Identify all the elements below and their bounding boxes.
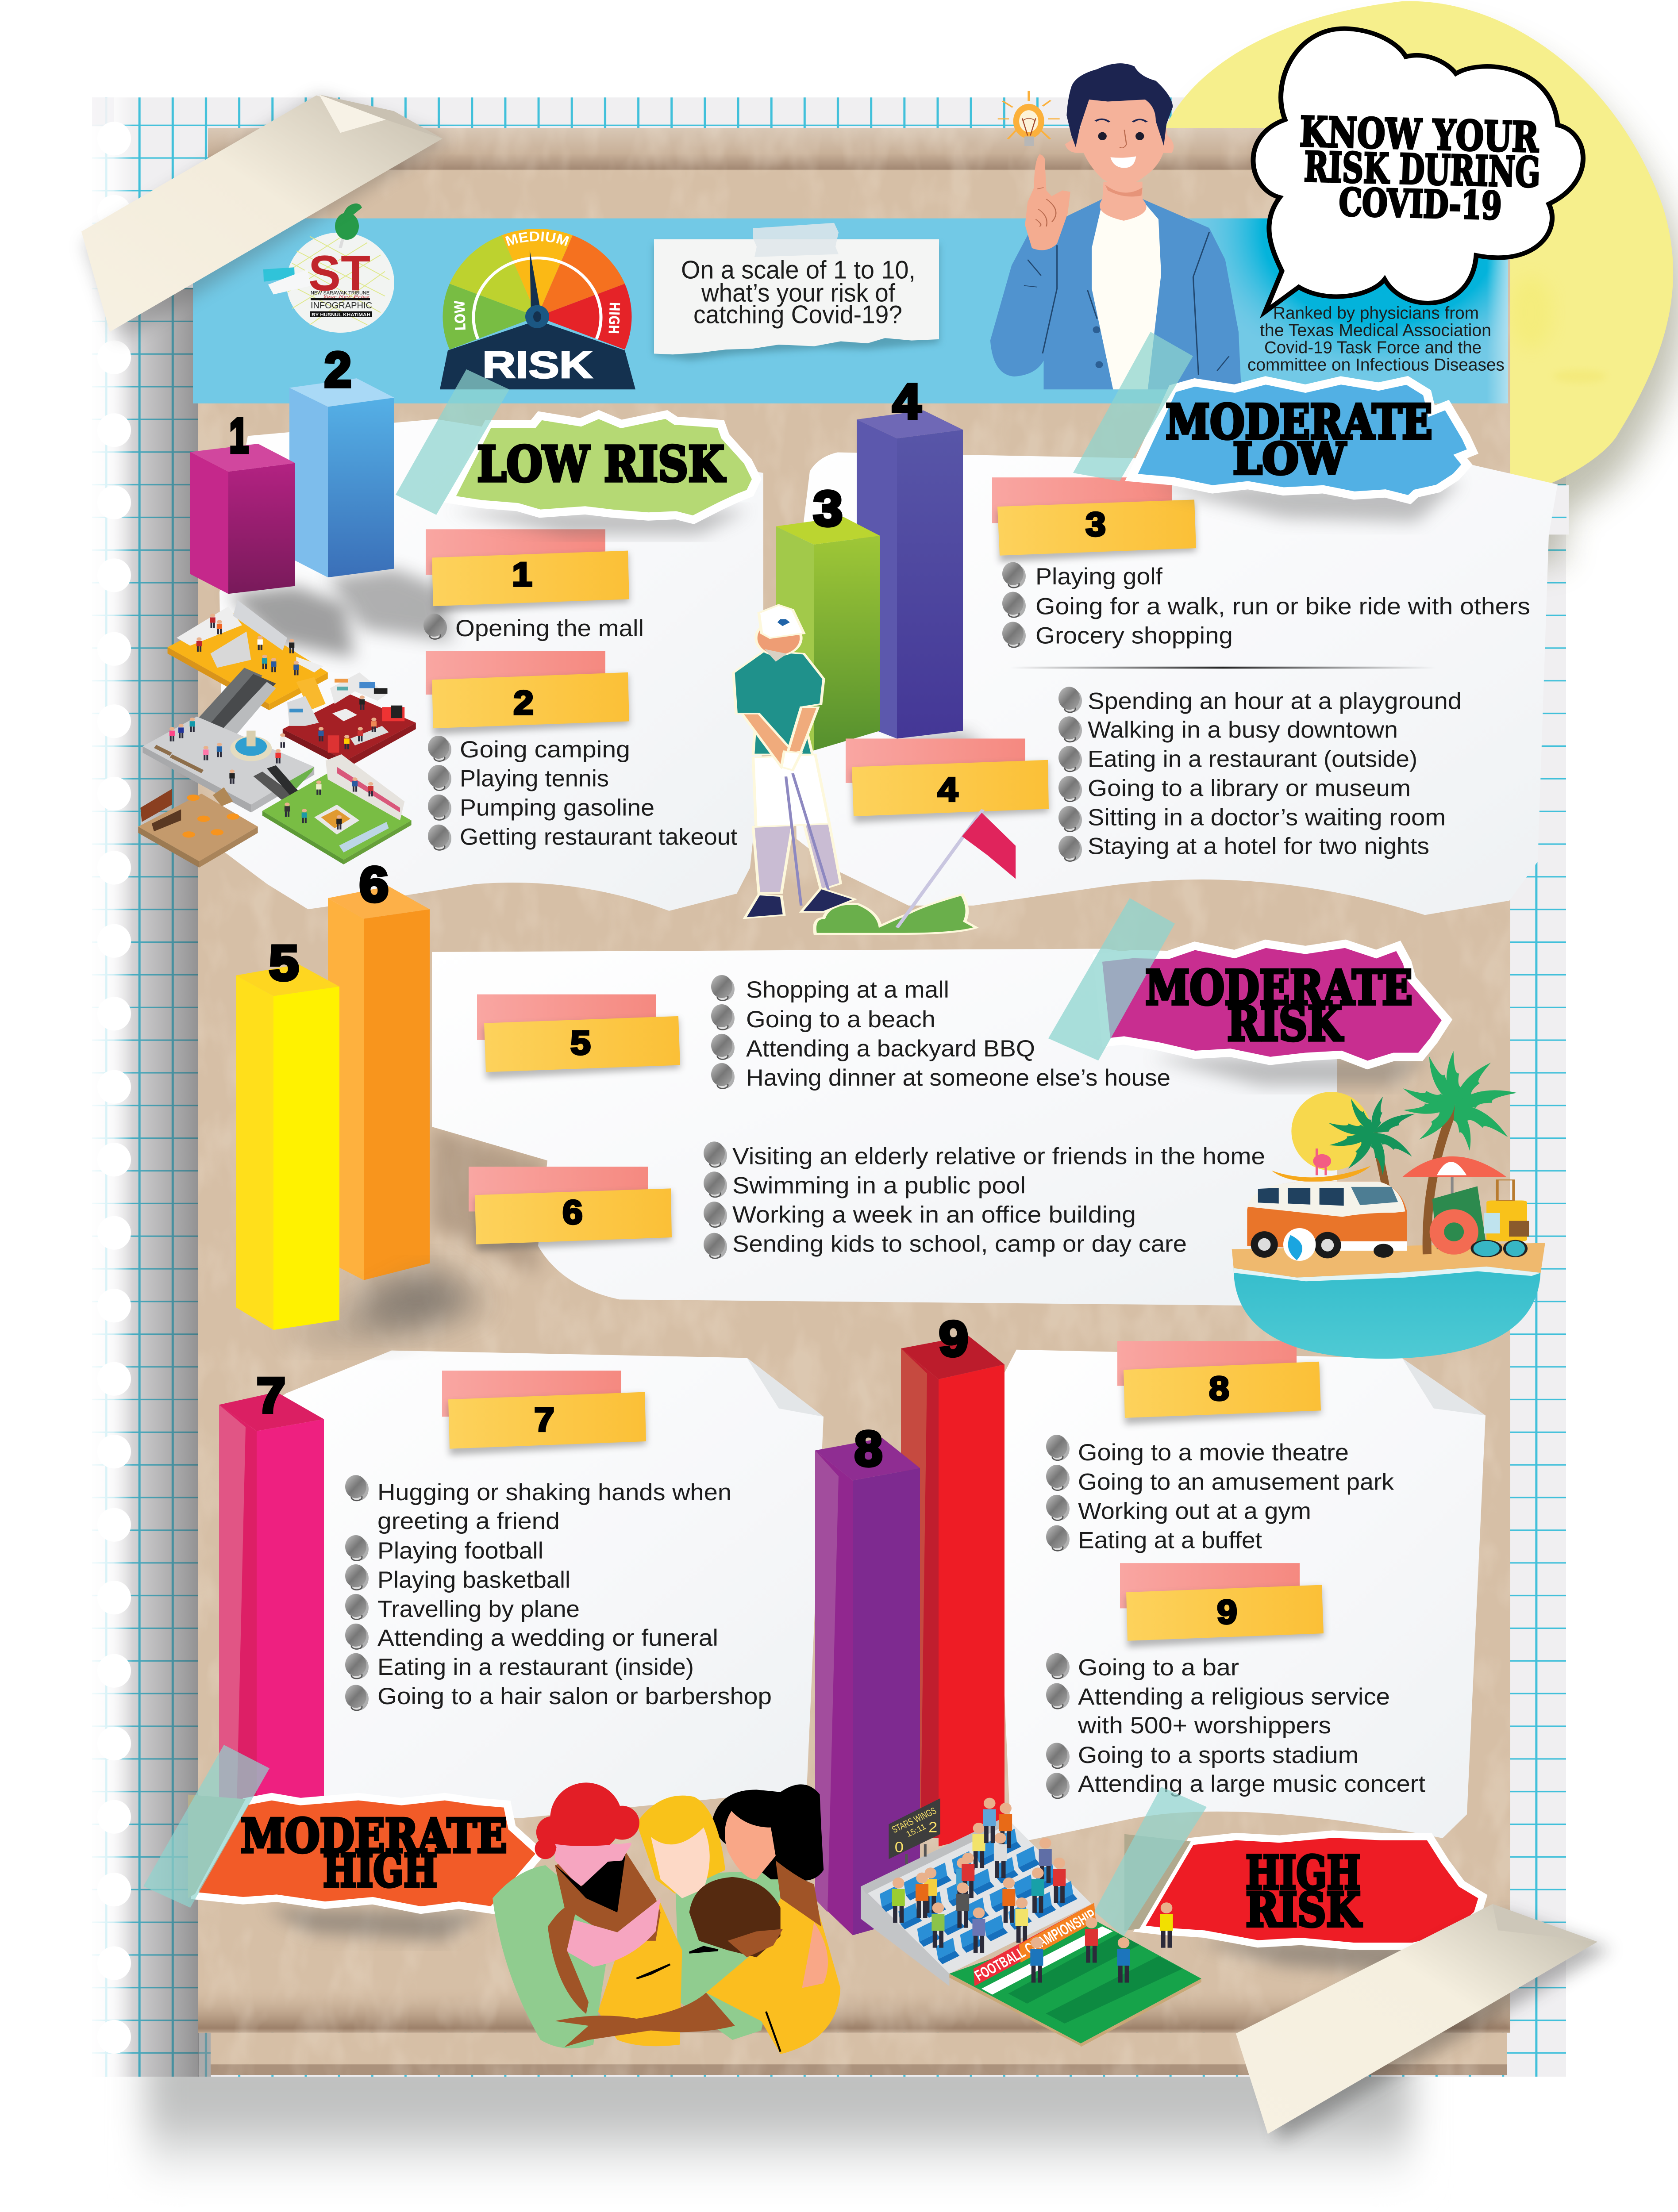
panel: moderate risk paper: [432, 949, 1337, 1306]
panel: low risk paper: [219, 419, 763, 911]
yellow sticky circle: [1162, 1, 1678, 563]
note: number 4: 4: [938, 770, 958, 808]
bar 1 magenta with number: [190, 407, 354, 658]
illustration: football stadium: [861, 1798, 1201, 2047]
note: number 1: [426, 529, 629, 613]
blue header banner: [193, 219, 1508, 403]
scoreboard: 2: [928, 1819, 937, 1836]
bar 4 purple with number: [857, 373, 1009, 769]
title text: [1297, 107, 1542, 229]
list: risk 4: [1058, 687, 1462, 861]
question note: what’s your risk of: [701, 278, 895, 307]
list: risk 9: Attending a religious service: [1078, 1683, 1390, 1710]
scoreboard: 15:11: [904, 1822, 928, 1839]
palm trees: [1328, 1051, 1518, 1254]
list: risk 9: with 500+ worshippers: [1078, 1712, 1331, 1739]
label: moderate high: MODERATE: [241, 1809, 507, 1863]
list: risk 6: Working a week in an office building: [732, 1201, 1136, 1228]
list: risk 7: Attending a wedding or funeral: [377, 1624, 718, 1651]
label: moderate risk: MODERATE: [1145, 960, 1412, 1016]
list: risk 8: [1046, 1435, 1394, 1553]
list: risk 2: Getting restaurant takeout: [460, 823, 737, 850]
grid notebook paper: [84, 97, 1566, 2077]
list: risk 7: [345, 1475, 772, 1710]
panel: moderate high paper: [248, 1351, 824, 1818]
illustration: isometric shopping mall: [138, 600, 416, 868]
panel: high risk paper: [991, 1350, 1486, 1844]
bar 5 yellow with number: [236, 935, 478, 1340]
list: risk 7: Playing basketball: [377, 1567, 570, 1593]
label: high risk: HIGH: [1246, 1846, 1361, 1900]
list: risk 9: Going to a sports stadium: [1078, 1742, 1359, 1768]
list: risk 7: greeting a friend: [377, 1508, 560, 1534]
note: number 3: 3: [1085, 505, 1106, 543]
label: moderate risk: [1048, 898, 1447, 1086]
bar 7 pink with number: [219, 1367, 324, 1805]
logo: ST infographic badge: [263, 204, 394, 333]
list: risk 8: Working out at a gym: [1078, 1498, 1311, 1524]
icon: green push pin: [335, 204, 362, 248]
list: risk 6: [704, 1141, 1265, 1258]
note: number 2: [426, 651, 629, 735]
bar 1 magenta with number: 1: [229, 407, 249, 463]
list: risk 8: Eating at a buffet: [1078, 1527, 1262, 1553]
list: risk 4: Staying at a hotel for two nights: [1088, 833, 1429, 859]
label: moderate low: MODERATE: [1166, 395, 1432, 450]
presenter man pointing up: [990, 63, 1241, 389]
bar 9 red with number: 9: [939, 1311, 968, 1367]
championship banner: FOOTBALL CHAMPIONSHIP: [972, 1906, 1099, 1984]
logo: ST infographic badge: Your New Price: [323, 294, 369, 299]
list: risk 5: Attending a backyard BBQ: [746, 1035, 1035, 1062]
note: number 6: [469, 1167, 672, 1251]
list: risk 9: Attending a large music concert: [1078, 1770, 1425, 1797]
risk gauge: HIGH: [605, 302, 623, 334]
bar 7 pink with number: 7: [257, 1367, 285, 1423]
logo: ST infographic badge: NEW SARAWAK TRIBUNE: [311, 291, 369, 296]
cork board: [198, 128, 1510, 2075]
note: number 6: 6: [562, 1193, 583, 1231]
source credit text: the Texas Medical Association: [1260, 320, 1491, 340]
title speech cloud: [1253, 29, 1583, 312]
list: risk 7: Travelling by plane: [377, 1596, 580, 1622]
scoreboard: 0: [895, 1839, 904, 1855]
illustration: beach with van: [1232, 1051, 1545, 1359]
logo: ST infographic badge: INFOGRAPHIC: [311, 301, 372, 311]
icon: light bulb: [998, 91, 1060, 146]
list: risk 7: Hugging or shaking hands when: [377, 1479, 731, 1505]
label: moderate high: [143, 1745, 541, 1941]
list: risk 2: Playing tennis: [460, 765, 609, 791]
bar 3 green with number: 3: [813, 481, 843, 536]
note: number 5: [477, 995, 680, 1079]
note: number 2: 2: [513, 684, 534, 722]
scoreboard: STARS WINGS: [890, 1805, 938, 1835]
list: risk 5: Having dinner at someone else’s house: [746, 1064, 1170, 1091]
list: risk 3: Playing golf: [1035, 563, 1163, 589]
gauge label: medium: MEDIUM: [503, 228, 571, 249]
list: risk 9: [1046, 1653, 1425, 1798]
illustration: flag and bush: [815, 810, 1016, 934]
logo letters: ST: [308, 245, 370, 301]
list: risk 8: Going to a movie theatre: [1078, 1439, 1349, 1465]
source credit text: [1247, 303, 1505, 374]
illustration: hugging friends: [493, 1782, 840, 2054]
list: risk 1: Opening the mall: [455, 615, 644, 641]
label: low risk: [396, 369, 757, 534]
list: risk 4: Sitting in a doctor’s waiting room: [1088, 804, 1446, 830]
list: risk 6: Sending kids to school, camp or day care: [732, 1230, 1187, 1257]
note: number 4: [846, 738, 1049, 823]
championship banner: [972, 1903, 1099, 1986]
bar 8 purple with number: [815, 1421, 920, 1935]
bar 2 blue with number: [289, 342, 451, 641]
list: risk 3: Grocery shopping: [1035, 622, 1233, 649]
bar 9 red with number: [901, 1311, 1004, 1847]
list: risk 6: Swimming in a public pool: [732, 1172, 1026, 1198]
list: risk 4: Walking in a busy downtown: [1088, 716, 1398, 743]
list: risk 7: Eating in a restaurant (inside): [377, 1654, 694, 1680]
risk gauge: LOW: [451, 300, 469, 331]
label: high risk: [1094, 1787, 1483, 1974]
bar 3 green with number: [776, 481, 880, 757]
bar 5 yellow with number: 5: [269, 935, 299, 991]
title text: RISK DURING: [1303, 142, 1541, 196]
note: number 7: 7: [534, 1400, 554, 1438]
note: number 5: 5: [570, 1024, 591, 1062]
panel: moderate low paper: [792, 452, 1558, 915]
list: risk 4: Going to a library or museum: [1088, 775, 1411, 801]
bar 2 blue with number: 2: [324, 342, 351, 397]
risk gauge: RISK: [482, 344, 593, 386]
bar 4 purple with number: 4: [893, 373, 921, 429]
list: risk 4: Eating in a restaurant (outside): [1088, 745, 1417, 772]
illustration: golfer: [733, 605, 855, 918]
note: number 1: 1: [512, 555, 532, 593]
list: risk 5: [711, 975, 1170, 1091]
note: number 9: [1120, 1563, 1324, 1647]
list: risk 2: Going camping: [460, 736, 630, 763]
label: high risk: RISK: [1246, 1882, 1362, 1937]
label: low risk: LOW RISK: [477, 436, 726, 493]
note: number 8: [1117, 1341, 1321, 1425]
label: moderate low: [1073, 332, 1473, 522]
list: risk 5: Going to a beach: [746, 1006, 935, 1033]
list: risk 4: Spending an hour at a playground: [1088, 687, 1462, 714]
list: risk 6: Visiting an elderly relative or friends in the home: [732, 1143, 1265, 1169]
source credit text: committee on Infectious Diseases: [1247, 355, 1505, 374]
title text: COVID-19: [1338, 180, 1502, 228]
list: risk 2: Pumping gasoline: [460, 794, 654, 821]
question note: [654, 223, 939, 361]
bar 6 orange with number: 6: [359, 856, 389, 912]
list: risk 8: Going to an amusement park: [1078, 1469, 1394, 1495]
bar 6 orange with number: [328, 856, 487, 1328]
tape: bottom right corner: [1236, 1904, 1611, 2143]
source credit text: Ranked by physicians from: [1273, 303, 1479, 323]
list: risk 3: Going for a walk, run or bike ride with others: [1035, 593, 1530, 619]
label: moderate low: LOW: [1233, 433, 1347, 484]
note: number 8: 8: [1209, 1370, 1229, 1407]
question note: catching Covid-19?: [693, 300, 902, 329]
list: risk 9: Going to a bar: [1078, 1654, 1239, 1681]
note: number 7: [442, 1371, 646, 1455]
risk gauge: [440, 228, 635, 389]
list: risk 5: Shopping at a mall: [746, 976, 949, 1003]
label: moderate risk: RISK: [1227, 997, 1343, 1052]
label: moderate high: HIGH: [323, 1844, 437, 1897]
bar 8 purple with number: 8: [854, 1421, 882, 1476]
list: risk 2: [428, 736, 737, 850]
title text: KNOW YOUR: [1299, 107, 1539, 161]
question text: On a scale of 1 to 10,: [681, 255, 916, 284]
list: risk 7: Playing football: [377, 1537, 543, 1564]
list: risk 3: [1002, 562, 1530, 649]
logo: ST infographic badge: BY HUSNUL KHATIMAH: [312, 312, 370, 318]
floor shadow under the board: [146, 2048, 1412, 2188]
note: number 3: [992, 477, 1196, 562]
source credit text: Covid-19 Task Force and the: [1264, 338, 1482, 357]
scoreboard: [889, 1798, 940, 1864]
list: risk 7: Going to a hair salon or barbershop: [377, 1683, 772, 1709]
tape: top left corner: [81, 95, 449, 342]
note: number 9: 9: [1217, 1593, 1237, 1631]
